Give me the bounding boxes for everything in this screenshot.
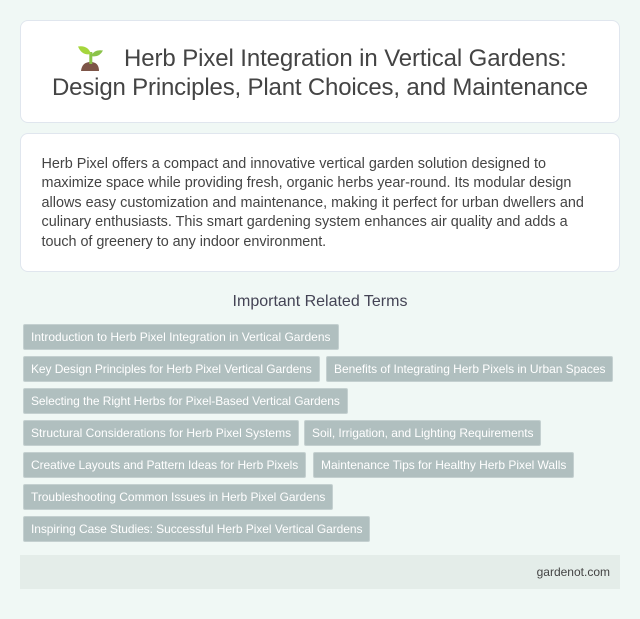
tag [23, 484, 333, 510]
tag: Inspiring Case Studies: Successful Herb Pixel Vertical Gardens [31, 522, 362, 536]
tag [23, 388, 348, 414]
tag: Structural Considerations for Herb Pixel Systems [31, 426, 291, 440]
panel: title card: Design Principles, Plant Choices, and Maintenance [52, 74, 588, 101]
tag [23, 356, 320, 382]
panel: description text [20, 133, 620, 272]
footer source: gardenot.com [537, 565, 610, 579]
tag: Maintenance Tips for Healthy Herb Pixel Walls [321, 458, 566, 472]
panel: description text: culinary enthusiasts. This smart gardening system enhances air quality and adds a [42, 214, 568, 230]
panel: title card [20, 20, 620, 123]
panel: description text: Herb Pixel offers a compact and innovative vertical garden solution designed to [42, 156, 546, 172]
tag: Troubleshooting Common Issues in Herb Pixel Gardens [31, 490, 325, 504]
tag [23, 420, 299, 446]
panel: description text: touch of greenery to any indoor environment. [42, 234, 326, 250]
tag [326, 356, 613, 382]
tag [23, 324, 338, 350]
heading: related terms: Important Related Terms [233, 293, 407, 310]
footer bar [20, 555, 620, 589]
tag: Introduction to Herb Pixel Integration in Vertical Gardens [31, 330, 330, 344]
panel: description text: maximize space while providing fresh, organic herbs year-round. Its modular design [42, 175, 571, 191]
tag: Selecting the Right Herbs for Pixel-Based Vertical Gardens [31, 394, 340, 408]
panel: description text: allows easy customization and maintenance, making it perfect for urban dwellers and [42, 195, 584, 211]
tag: Key Design Principles for Herb Pixel Vertical Gardens [31, 362, 312, 376]
tag: Benefits of Integrating Herb Pixels in Urban Spaces [334, 362, 605, 376]
icon: seedling [78, 46, 103, 71]
tag [304, 420, 541, 446]
tag: Creative Layouts and Pattern Ideas for Herb Pixels [31, 458, 298, 472]
tag [23, 452, 306, 478]
tag [313, 452, 574, 478]
tag [23, 516, 370, 542]
title: Herb Pixel Integration in Vertical Gardens: [124, 45, 567, 72]
tag: Soil, Irrigation, and Lighting Requirements [312, 426, 533, 440]
